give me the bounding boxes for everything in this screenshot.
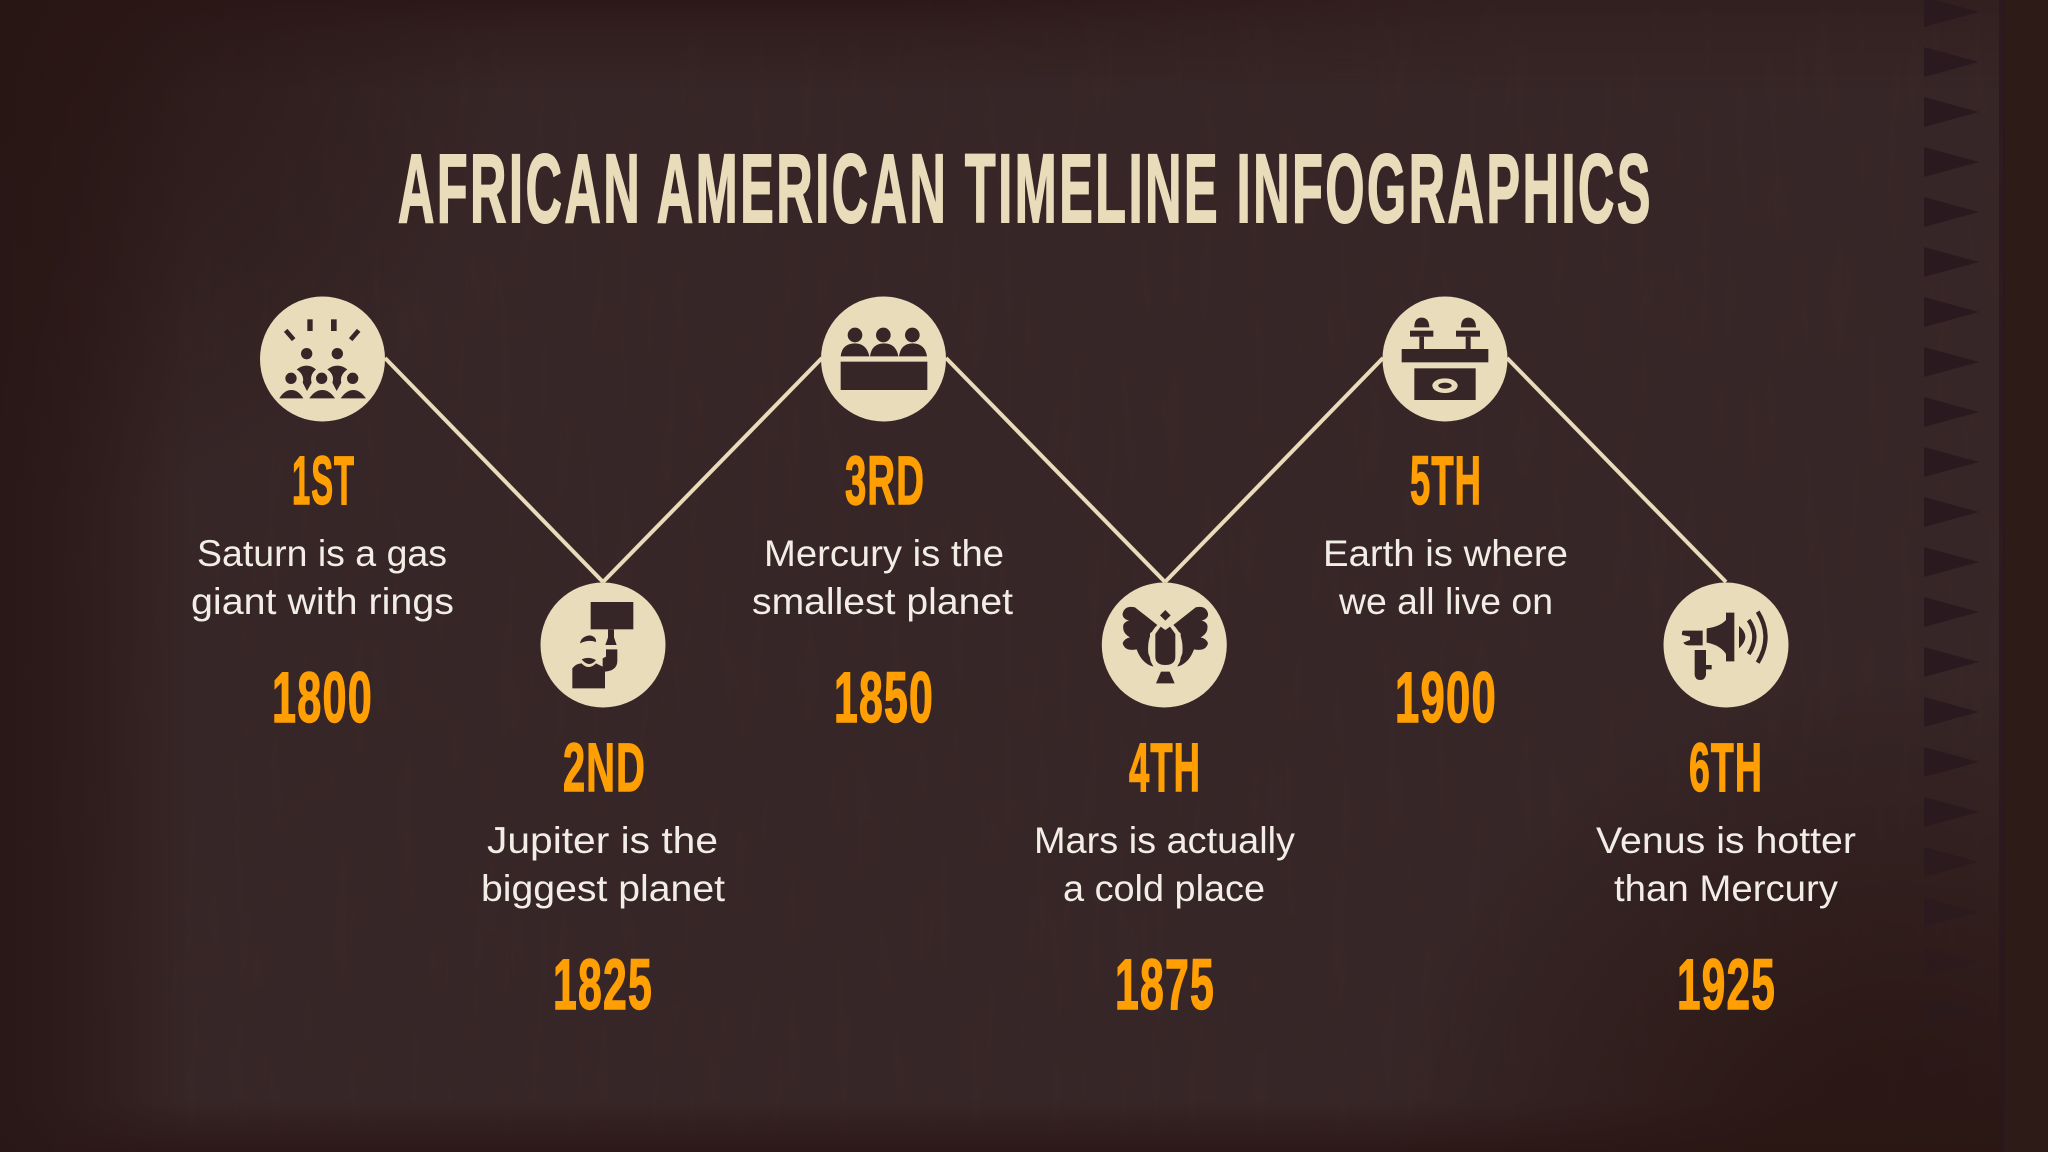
description: than Mercury <box>1614 868 1839 909</box>
year: 1825 <box>553 946 653 1025</box>
ordinal: 3RD <box>845 442 925 519</box>
icon: podium with microphones <box>1382 296 1508 422</box>
ordinal: 4TH <box>1129 729 1201 806</box>
year: 1850 <box>834 659 934 738</box>
year: 1900 <box>1395 659 1497 738</box>
description: Earth is where <box>1323 533 1568 574</box>
description: biggest planet <box>481 868 726 909</box>
icon: megaphone <box>1664 582 1788 708</box>
step 5 <box>1323 296 1568 738</box>
step 3 <box>752 296 1014 738</box>
right edge band <box>1999 0 2048 1152</box>
step 6 <box>1596 582 1856 1025</box>
description: we all live on <box>1338 581 1553 622</box>
icon: bird with spread wings <box>1102 582 1227 708</box>
description: Saturn is a gas <box>197 533 447 574</box>
year: 1800 <box>272 659 373 738</box>
description: Mercury is the <box>764 533 1004 574</box>
ordinal: 2ND <box>563 729 646 806</box>
year: 1875 <box>1115 946 1215 1025</box>
description: Mars is actually <box>1034 820 1296 861</box>
triangle border pattern <box>1924 0 1979 1127</box>
description: Jupiter is the <box>487 820 718 861</box>
description: giant with rings <box>191 581 454 622</box>
description: smallest planet <box>752 581 1014 622</box>
step 4 <box>1034 582 1296 1025</box>
ordinal: 5TH <box>1410 442 1482 519</box>
description: Venus is hotter <box>1596 820 1856 861</box>
step 1 <box>191 296 454 738</box>
connector segments <box>385 358 1726 582</box>
description: a cold place <box>1063 868 1265 909</box>
step 2 <box>481 582 726 1025</box>
step 1: 1ST <box>292 442 355 519</box>
ordinal: 6TH <box>1689 729 1763 806</box>
icon: protester with sign <box>540 582 666 708</box>
icon: crowd <box>260 296 385 422</box>
year: 1925 <box>1677 946 1776 1025</box>
icon: panel of people at table <box>821 296 946 422</box>
